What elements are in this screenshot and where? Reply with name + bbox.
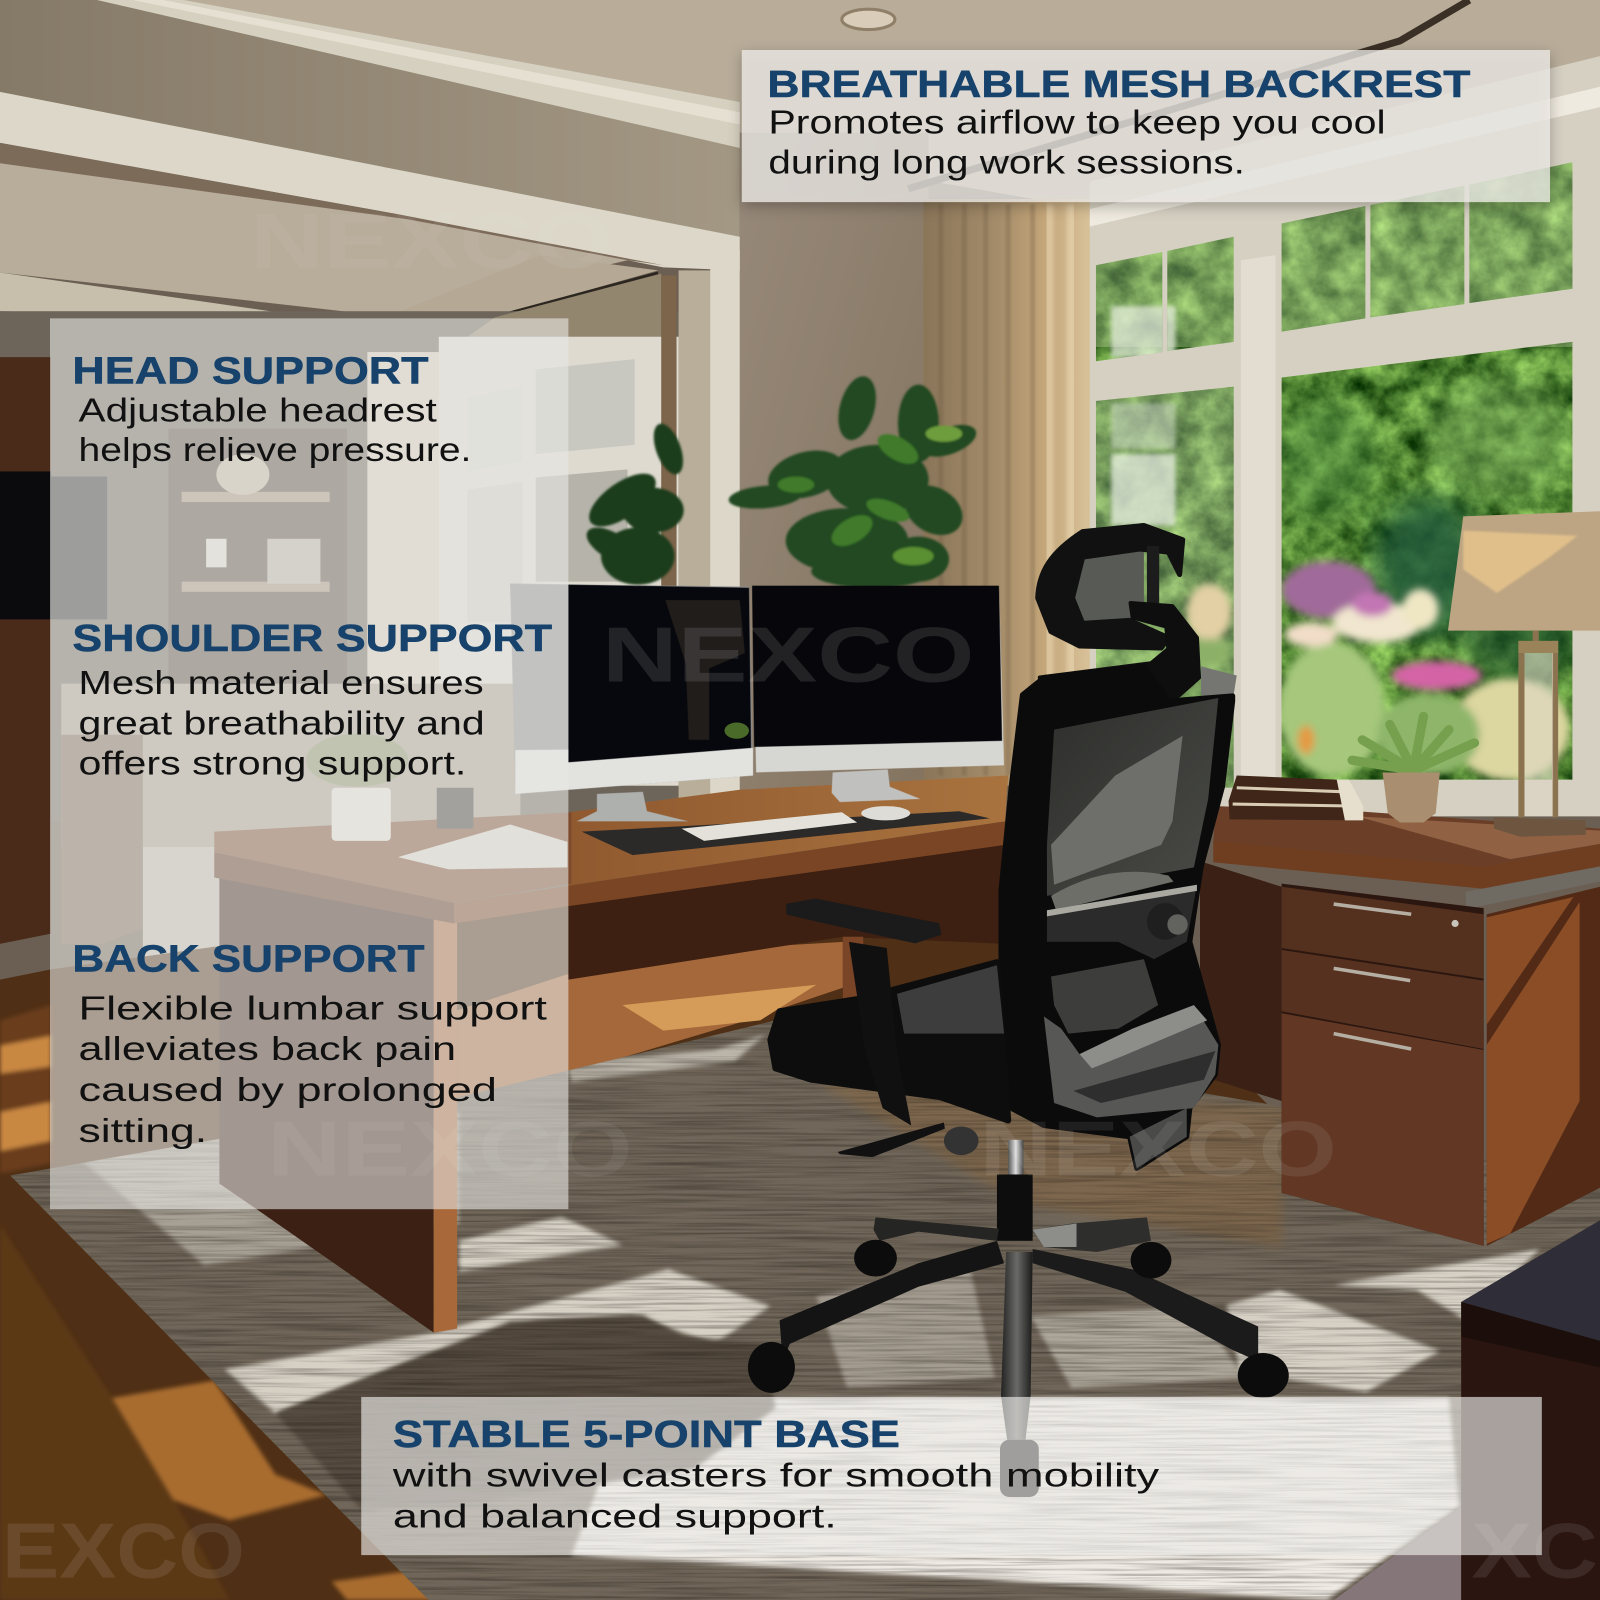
panel: stable base: [361, 1397, 1542, 1555]
chair back frame: [1201, 666, 1237, 701]
right foreground cabinet: [1461, 1220, 1600, 1600]
seat: [770, 962, 1008, 1120]
mesh backrest: [1047, 698, 1218, 896]
NEXCO watermarks: NEXCO: [602, 613, 974, 699]
dual monitors: [510, 584, 1004, 821]
sunlit rug patches: [61, 1035, 1540, 1600]
description: backrest: [768, 105, 1386, 181]
description: backrest: Promotes airflow to keep you cool: [768, 105, 1386, 142]
ceiling: [92, 0, 1600, 209]
description: head support: helps relieve pressure.: [79, 432, 471, 469]
right wall cornice: [1090, 56, 1600, 816]
background room photo: [0, 0, 1600, 1188]
floor and rug: [0, 842, 1600, 1600]
wall by curtain: [740, 133, 929, 806]
NEXCO watermarks: NEXCO: [250, 198, 612, 284]
description: back support: caused by prolonged: [79, 1072, 497, 1109]
NEXCO watermarks: NEXCO: [267, 1107, 633, 1193]
description: shoulder support: Mesh material ensures: [79, 665, 484, 702]
lumbar support: [1047, 872, 1197, 959]
front desk: [214, 734, 1008, 1333]
armrest: [788, 900, 940, 1126]
books, plant and lamp: [1229, 511, 1600, 837]
adjoining room ceiling: [0, 163, 628, 316]
NEXCO watermarks: XC: [1471, 1509, 1598, 1595]
NEXCO watermarks: NEXCO: [980, 1107, 1337, 1193]
garden window panes: [1082, 153, 1592, 796]
description: stable base: and balanced support.: [393, 1499, 837, 1536]
description: back support: [79, 990, 548, 1150]
gas cylinder: [1008, 1140, 1023, 1179]
description: back support: alleviates back pain: [79, 1031, 456, 1068]
description: back support: sitting.: [79, 1113, 207, 1150]
casters: [748, 1240, 1289, 1497]
heading: stable 5-point base: STABLE 5-POINT BASE: [393, 1413, 900, 1455]
headrest: [1038, 526, 1199, 701]
panel: left support features: [50, 318, 568, 1209]
heading: shoulder support: SHOULDER SUPPORT: [72, 617, 552, 659]
tilt lever and knob: [838, 1122, 979, 1157]
heading: back support: BACK SUPPORT: [72, 937, 424, 979]
curtain rod: [908, 0, 1469, 189]
NEXCO watermarks: EXCO: [2, 1509, 245, 1595]
door header beam: [0, 92, 740, 270]
sofa and coffee table: [61, 684, 520, 847]
panel: breathable mesh backrest: [742, 50, 1550, 202]
heading: breathable mesh backrest: BREATHABLE MESH BACKREST: [767, 63, 1470, 105]
description: head support: Adjustable headrest: [79, 392, 438, 429]
description: stable base: with swivel casters for smooth mobility: [392, 1458, 1159, 1495]
chair shadow on rug: [276, 1315, 776, 1510]
description: back support: Flexible lumbar support: [79, 990, 548, 1027]
heading: head support: HEAD SUPPORT: [72, 350, 429, 392]
description: head support: [79, 392, 471, 469]
ceiling light: [842, 9, 895, 30]
potted plants behind monitors: [581, 372, 980, 588]
five star base: [780, 1217, 1258, 1440]
description: shoulder support: [79, 665, 485, 782]
ergonomic mesh chair: [748, 526, 1289, 1497]
adjoining room: [0, 311, 679, 821]
description: shoulder support: great breathability and: [79, 706, 485, 743]
lower mesh and lumbar shell: [1051, 959, 1158, 1034]
description: shoulder support: offers strong support.: [79, 745, 466, 782]
flowers and shrubs: [1187, 561, 1569, 781]
door jamb: [679, 270, 715, 806]
description: backrest: during long work sessions.: [768, 144, 1245, 181]
description: stable base: [392, 1458, 1159, 1536]
right desk with drawers: [1200, 806, 1600, 1246]
curtain: [923, 199, 1092, 786]
